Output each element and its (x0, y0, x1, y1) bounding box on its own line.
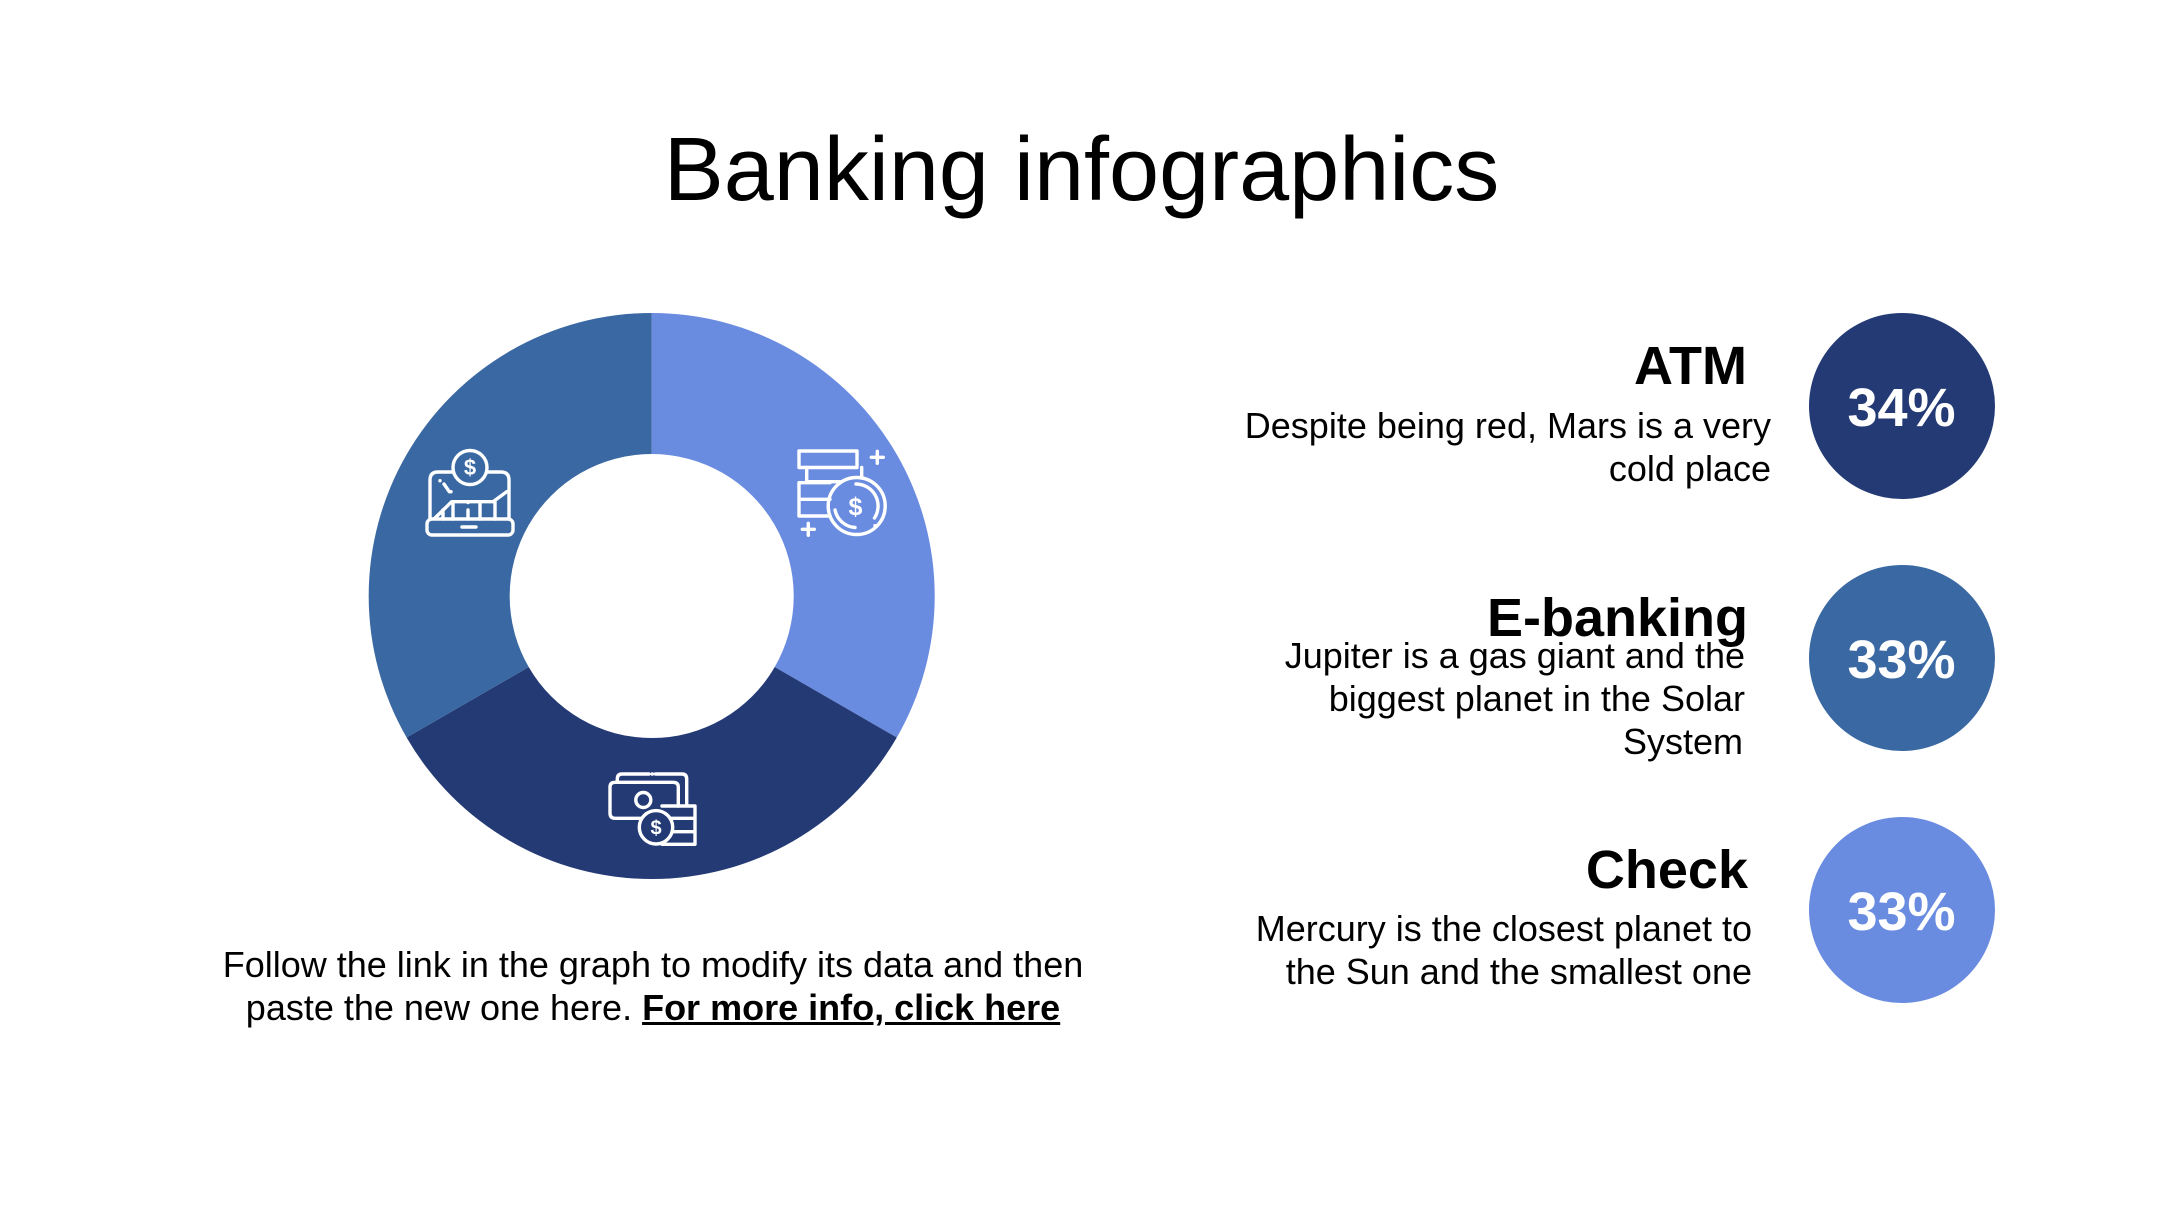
icon: laptop with chart: $ (464, 455, 476, 480)
description: ATM: Despite being red, Mars is a very (1245, 405, 1771, 446)
description: E-banking: System (1623, 721, 1743, 762)
icon: laptop with chart (427, 450, 513, 535)
icon: banknotes and coins: $ (650, 818, 662, 840)
caption with link: Follow the link in the graph to modify its data and then (223, 944, 1083, 985)
title: Banking infographics (664, 120, 1499, 220)
icon: coin stack: $ (849, 493, 863, 521)
caption with link (223, 944, 1083, 1028)
heading: Check: Check (1586, 840, 1748, 900)
item: E-banking (1285, 588, 1748, 762)
description: Check: the Sun and the smallest one (1286, 951, 1752, 992)
description: Check: Mercury is the closest planet to (1256, 908, 1752, 949)
caption with link: paste the new one here. For more info, click here (246, 987, 1060, 1028)
percent circle: E-banking: 33% (1847, 630, 1956, 690)
description: Check (1256, 908, 1752, 992)
heading: E-banking: E-banking (1487, 588, 1748, 648)
item: ATM (1245, 336, 1771, 489)
heading: ATM: ATM (1634, 336, 1747, 396)
description: ATM: cold place (1609, 448, 1771, 489)
percent circle: Check (1808, 817, 1994, 1003)
icon: coin stack (799, 451, 885, 535)
description: E-banking: Jupiter is a gas giant and the (1285, 635, 1745, 676)
percent circle: ATM: 34% (1847, 378, 1956, 438)
percent circle: E-banking (1808, 565, 1994, 751)
segment: ATM (407, 667, 897, 879)
percent circle: Check: 33% (1847, 882, 1956, 942)
segment: Check (652, 313, 935, 738)
description: E-banking: biggest planet in the Solar (1329, 678, 1745, 719)
segment: E-banking (369, 313, 652, 738)
item: Check (1256, 840, 1752, 992)
icon: banknotes and coins (610, 774, 695, 844)
description: ATM (1245, 405, 1771, 489)
description: E-banking (1285, 635, 1745, 762)
percent circle: ATM (1808, 313, 1994, 499)
